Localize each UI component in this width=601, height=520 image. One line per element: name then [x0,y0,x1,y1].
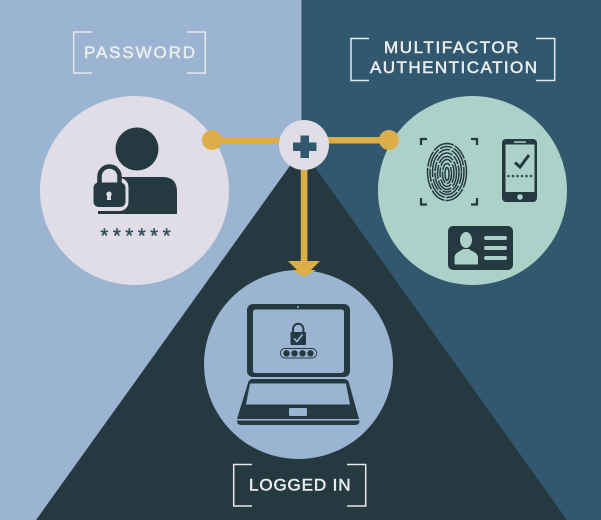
background: right navy panel [302,0,601,520]
arrow tip over circle [292,270,316,277]
panel: password circle [40,96,229,285]
connector dot: right [379,130,399,150]
icon: laptop [237,304,360,425]
password asterisks: ****** [100,226,171,248]
background: dark triangle [36,149,567,520]
icon: phone with check [502,139,537,202]
heading: multifactor authentication: MULTIFACTOR [384,38,518,57]
connector lines and arrow [212,137,389,277]
panel: multifactor circle [378,96,567,285]
heading: password [74,32,205,73]
connector dot: left [202,130,222,150]
heading: password: PASSWORD [84,43,195,62]
arrow head [288,261,320,277]
screen password field [280,348,317,358]
panel: logged in circle [204,270,393,459]
icon: ID card [448,226,513,270]
heading: logged in: LOGGED IN [249,476,350,494]
screen padlock [290,324,306,345]
heading: multifactor authentication: AUTHENTICATION [370,58,537,77]
heading: multifactor authentication [351,38,555,80]
background: left light panel [0,0,302,520]
icon: user with padlock [90,128,177,214]
icon: fingerprint scan [421,139,477,204]
heading: logged in [234,464,366,506]
icon: plus [293,136,316,158]
plus circle [279,120,329,170]
